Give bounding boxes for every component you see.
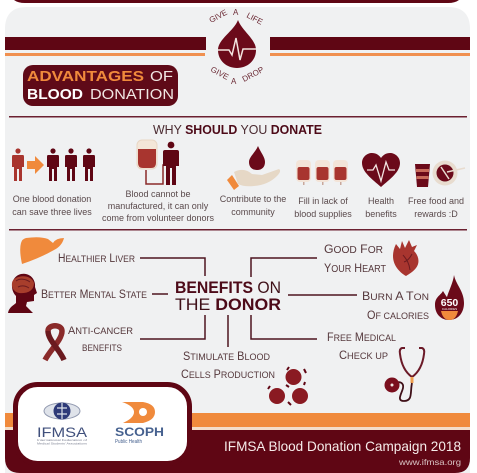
benefit: anti-cancer: BENEFITS <box>82 343 122 354</box>
icon: stethoscope <box>384 348 424 401</box>
icon: flame 650 calories <box>435 275 464 320</box>
logo: give a life drop: GIVE <box>208 8 229 25</box>
icon: donor and three people <box>12 148 95 181</box>
item: free food and rewards: Free food and <box>408 196 464 206</box>
benefit: good for your heart <box>324 240 418 276</box>
benefit: anti-cancer <box>45 325 133 360</box>
logo: give a life drop: GIVE <box>209 65 230 82</box>
footer band <box>5 413 470 473</box>
benefit: free medical check up <box>327 332 424 401</box>
footer text: website: www.ifmsa.org <box>398 457 461 467</box>
heading: benefits on the donor <box>175 278 281 314</box>
logo: SCOPH: Public Health <box>115 439 142 445</box>
item: free food and rewards: rewards :D <box>414 209 458 219</box>
title: advantages of blood donation: ADVANTAGES <box>27 68 144 85</box>
heading: why should you donate: WHY SHOULD YOU DONATE <box>153 123 322 137</box>
item: blood cannot be manufactured <box>102 140 215 223</box>
item: fill in lack of blood supplies <box>294 160 352 219</box>
item: one donation saves three lives: can save three lives <box>12 207 92 217</box>
logo: IFMSA: International Federation of <box>37 438 87 442</box>
title: advantages of blood donation: DONATION <box>90 86 174 103</box>
item: one donation saves three lives <box>12 148 95 217</box>
item: fill in lack of blood supplies: blood supplies <box>294 209 352 219</box>
item: one donation saves three lives: One blood donation <box>13 194 91 204</box>
logo: give a life drop: A <box>231 77 237 86</box>
item: health benefits <box>362 153 400 219</box>
item: fill in lack of blood supplies: Fill in lack of <box>298 196 348 206</box>
item: free food and rewards <box>408 160 465 219</box>
logo: IFMSA: Medical Students' Associations <box>37 442 88 446</box>
benefit: anti-cancer: ANTI-CANCER <box>68 325 133 337</box>
logo: IFMSA <box>37 402 88 446</box>
benefit: burn a ton of calories: OF CALORIES <box>367 310 429 322</box>
item: blood cannot be manufactured: Blood cannot be <box>125 189 191 199</box>
icon: liver <box>20 237 64 264</box>
benefit: good for your heart: YOUR HEART <box>324 261 386 275</box>
benefit: free medical check up: FREE MEDICAL <box>327 332 396 344</box>
title: advantages of blood donation: OF <box>150 68 173 85</box>
title: advantages of blood donation: BLOOD <box>27 86 83 103</box>
icon: blood cells <box>268 367 308 405</box>
icon: heart with pulse <box>362 153 400 187</box>
icon: cup and plate <box>415 160 465 187</box>
benefit: free medical check up: CHECK UP <box>339 350 388 362</box>
icon: blood bag and donor <box>137 140 179 185</box>
logo: give a life drop <box>208 8 265 86</box>
logo: give a life drop: DROP <box>241 65 265 84</box>
icon: flame 650 calories: 650 <box>441 297 458 309</box>
logo: SCOPH <box>115 402 164 445</box>
icon: hand holding drop <box>227 146 280 190</box>
logo panel <box>16 384 190 464</box>
connector lines <box>140 258 357 347</box>
logo: IFMSA: IFMSA <box>37 425 87 440</box>
item: blood cannot be manufactured: manufactured, it can only <box>108 201 209 211</box>
benefit: good for your heart: GOOD FOR <box>324 242 383 256</box>
heading: benefits on the donor: THE DONOR <box>175 295 281 314</box>
benefit: healthier liver: HEALTHIER LIVER <box>58 253 135 265</box>
item: blood cannot be manufactured: come from volunteer donors <box>102 213 215 223</box>
icon: flame 650 calories: CALORIES <box>442 307 457 311</box>
footer text: campaign: IFMSA Blood Donation Campaign 2018 <box>224 438 461 454</box>
benefit: burn a ton of calories <box>362 275 464 322</box>
benefit: better mental state: BETTER MENTAL STATE <box>41 289 147 301</box>
item: contribute to the community: community <box>231 207 275 217</box>
item: contribute to the community: Contribute to the <box>220 194 286 204</box>
benefit: better mental state <box>8 274 147 313</box>
icon: anatomical heart <box>393 240 418 276</box>
heading: benefits on the donor: BENEFITS ON <box>175 278 281 297</box>
icon: three blood bags <box>296 160 348 185</box>
benefit: stimulate blood cells: STIMULATE BLOOD <box>183 351 270 363</box>
item: health benefits: Health <box>368 196 394 206</box>
header band <box>5 37 470 56</box>
logo: SCOPH: SCOPH <box>115 425 164 439</box>
icon: ribbon <box>45 326 64 360</box>
icon: head with brain <box>8 274 37 313</box>
item: health benefits: benefits <box>365 209 397 219</box>
benefit: healthier liver <box>20 237 135 265</box>
logo: give a life drop: A <box>233 8 239 17</box>
benefit: burn a ton of calories: BURN A TON <box>362 291 429 303</box>
benefit: stimulate blood cells <box>181 351 308 405</box>
title: advantages of blood donation <box>23 65 178 106</box>
benefit: stimulate blood cells: CELLS PRODUCTION <box>181 369 275 381</box>
logo: give a life drop: LIFE <box>245 11 264 27</box>
item: contribute to the community <box>220 146 286 217</box>
